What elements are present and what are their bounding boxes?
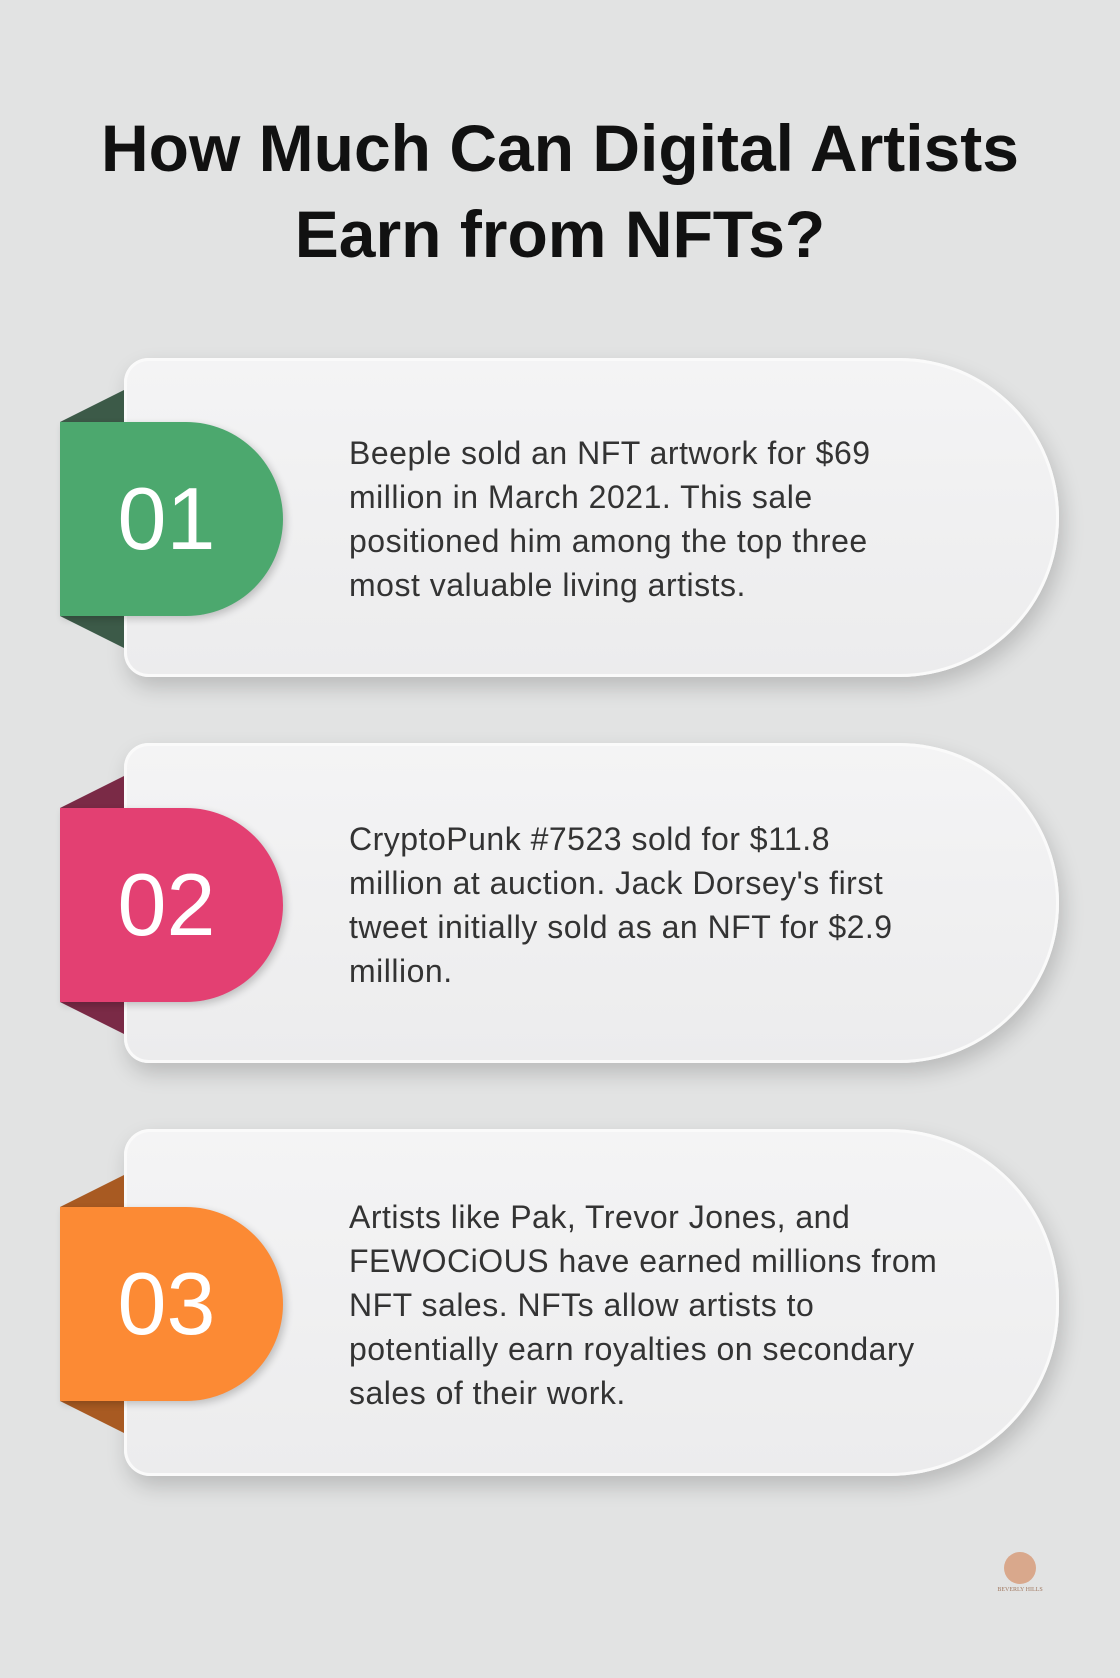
text 2: million at auction. Jack Dorsey's first — [349, 865, 883, 901]
fold bottom 3 — [60, 1401, 124, 1433]
badge 03: 03 — [118, 1254, 215, 1353]
panel: card 1 — [60, 358, 1071, 696]
panel: card 2 — [60, 743, 1071, 1082]
fold top 1 — [60, 390, 124, 422]
title — [101, 111, 1019, 271]
fold top 3 — [60, 1175, 124, 1207]
text 1: million in March 2021. This sale — [349, 479, 813, 515]
text 3 — [349, 1199, 937, 1411]
text 3: NFT sales. NFTs allow artists to — [349, 1287, 814, 1323]
text 3: Artists like Pak, Trevor Jones, and — [349, 1199, 850, 1235]
text 3: FEWOCiOUS have earned millions from — [349, 1243, 937, 1279]
badge 02: 02 — [118, 855, 215, 954]
badge 01: 01 — [118, 469, 215, 568]
text 1: positioned him among the top three — [349, 523, 868, 559]
fold top 2 — [60, 776, 124, 808]
text 1: most valuable living artists. — [349, 567, 746, 603]
text 2 — [349, 821, 893, 989]
panel: card 3 — [60, 1129, 1072, 1494]
fold bottom 1 — [60, 616, 124, 648]
title: How Much Can Digital Artists — [101, 111, 1019, 185]
logo: BEVERLY HILLS — [997, 1587, 1043, 1593]
badge 01 — [60, 422, 283, 616]
badge 02 — [60, 808, 283, 1002]
title: Earn from NFTs? — [295, 197, 825, 271]
text 1: Beeple sold an NFT artwork for $69 — [349, 435, 871, 471]
fold bottom 2 — [60, 1002, 124, 1034]
text 1 — [349, 435, 871, 603]
text 3: sales of their work. — [349, 1375, 626, 1411]
text 3: potentially earn royalties on secondary — [349, 1331, 915, 1367]
text 2: tweet initially sold as an NFT for $2.9 — [349, 909, 893, 945]
text 2: million. — [349, 953, 453, 989]
text 2: CryptoPunk #7523 sold for $11.8 — [349, 821, 830, 857]
badge 03 — [60, 1207, 283, 1401]
logo — [997, 1552, 1043, 1593]
